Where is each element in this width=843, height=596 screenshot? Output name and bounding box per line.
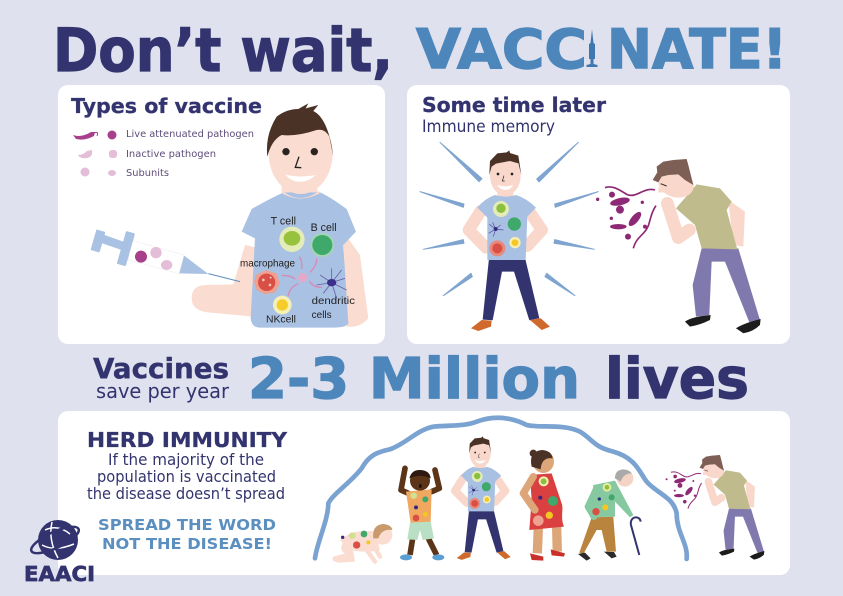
heading: types of vaccine: Types of vaccine xyxy=(71,94,262,118)
middle text: vaccines save per year: save per year xyxy=(96,379,230,403)
panel: some time later xyxy=(407,85,790,344)
legend: Subunits xyxy=(126,168,169,179)
slogan: SPREAD THE WORD xyxy=(98,516,276,534)
middle text: vaccines save per year xyxy=(93,353,230,403)
child xyxy=(400,468,444,560)
title: VACCINATE with syringe as the letter I: NATE! xyxy=(607,18,787,81)
title: Don't wait: Don’t wait, xyxy=(53,16,393,86)
illustration: vaccinated boy with syringe: NKcell xyxy=(266,314,296,325)
middle text: vaccines save per year: Vaccines xyxy=(93,353,229,385)
subheading: immune memory: Immune memory xyxy=(422,117,555,136)
slogan: NOT THE DISEASE! xyxy=(102,535,272,553)
illustration: protective dome and community xyxy=(315,418,764,563)
illustration: protected figure, rays and coughing person xyxy=(420,142,761,333)
legend xyxy=(73,129,254,179)
legend: Inactive pathogen xyxy=(126,149,216,160)
elderly man with cane xyxy=(578,469,641,561)
illustration: vaccinated boy with syringe: macrophage xyxy=(240,258,295,269)
headline: lives: lives xyxy=(605,347,749,412)
text: explanation: the disease doesn’t spread xyxy=(87,484,285,503)
logo: EAACI: EAACI xyxy=(24,562,95,586)
text: explanation: If the majority of the xyxy=(108,450,264,469)
heading: herd immunity: HERD IMMUNITY xyxy=(87,428,288,452)
panel: herd immunity xyxy=(58,411,790,575)
coughing person xyxy=(666,455,764,560)
panel: types of vaccine xyxy=(58,85,385,344)
illustration: vaccinated boy with syringe: B cell xyxy=(311,222,337,234)
illustration: vaccinated boy with syringe: dendritic xyxy=(312,296,355,307)
headline number: 2-3 million: 2-3 Million xyxy=(248,347,580,412)
baby xyxy=(332,524,392,563)
pregnant woman xyxy=(523,450,565,561)
illustration: vaccinated boy with syringe: cells xyxy=(312,310,332,321)
slogan xyxy=(98,516,276,553)
logo: EAACI xyxy=(24,520,95,586)
text: explanation xyxy=(87,450,285,503)
title: VACCINATE with syringe as the letter I: VACC xyxy=(416,18,587,81)
illustration: vaccinated boy with syringe xyxy=(91,103,368,328)
illustration: vaccinated boy with syringe: T cell xyxy=(271,215,296,227)
text: explanation: population is vaccinated xyxy=(97,467,276,486)
legend: Live attenuated pathogen xyxy=(126,129,254,140)
vaccinated man xyxy=(455,436,511,560)
heading: some time later: Some time later xyxy=(422,93,607,117)
title: VACCINATE with syringe as the letter I xyxy=(416,18,787,81)
